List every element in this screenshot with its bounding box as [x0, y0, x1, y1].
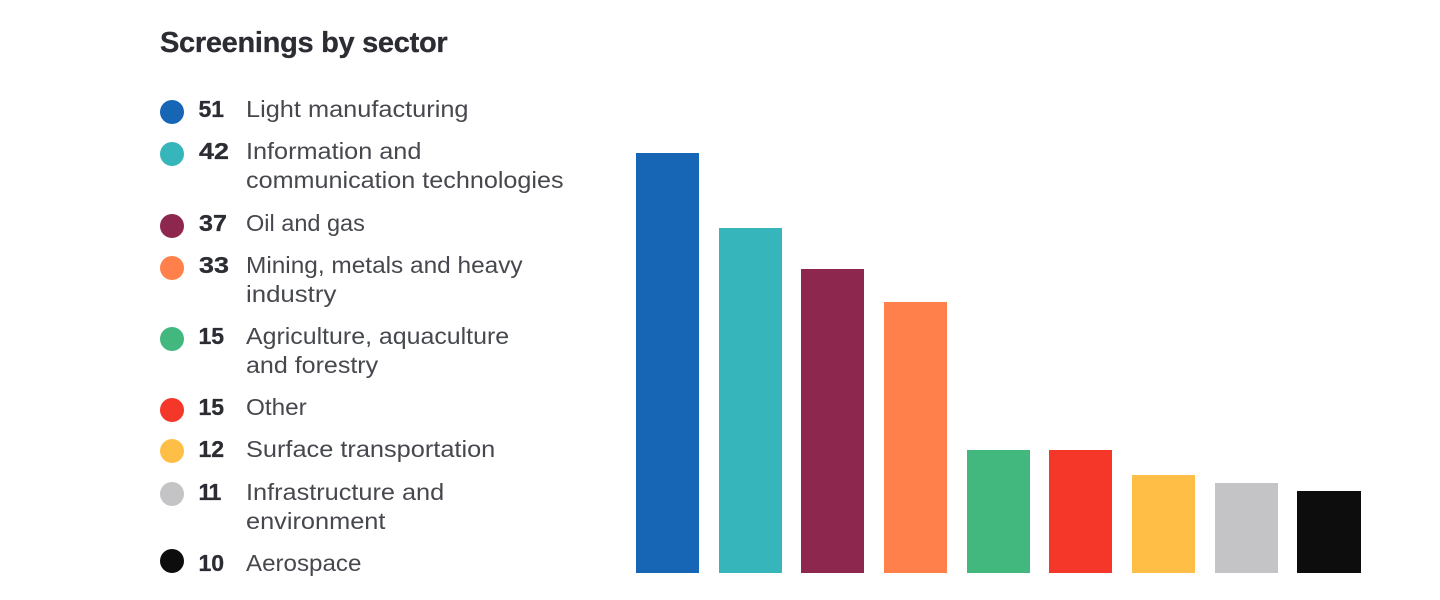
legend item: Mining, metals and heavy industry: 33 — [198, 252, 228, 278]
legend item: Information and communication technologies: communication technologies — [246, 167, 564, 193]
legend item: Light manufacturing: Light manufacturing — [246, 96, 469, 122]
legend item: Infrastructure and environment: environment — [246, 508, 385, 534]
legend item: Aerospace — [160, 549, 361, 576]
legend item: Mining, metals and heavy industry: Mining, metals and heavy — [246, 252, 523, 278]
bar: Other 15 — [1049, 450, 1112, 573]
legend item: Surface transportation: Surface transportation — [246, 436, 495, 462]
bar: Light manufacturing 51 — [636, 153, 699, 573]
title: Screenings by sector — [160, 27, 447, 59]
legend item: Aerospace: Aerospace — [246, 550, 361, 576]
legend item: Other: Other — [246, 394, 307, 420]
legend item: Aerospace: 10 — [198, 550, 224, 576]
bar: Oil and gas 37 — [801, 268, 864, 573]
legend item: Agriculture, aquaculture and forestry — [160, 323, 509, 378]
legend item: Other — [160, 394, 307, 422]
legend — [160, 96, 564, 576]
legend item: Other: 15 — [198, 394, 224, 420]
legend item: Surface transportation: 12 — [198, 436, 224, 462]
legend item: Light manufacturing — [160, 96, 469, 124]
legend item: Information and communication technologies: Information and — [246, 138, 421, 164]
legend item: Mining, metals and heavy industry: industry — [246, 281, 336, 307]
bar: Mining, metals and heavy industry 33 — [884, 302, 947, 573]
legend item: Infrastructure and environment: 11 — [198, 479, 220, 505]
bar chart — [636, 153, 1361, 573]
legend item: Agriculture, aquaculture and forestry: 15 — [198, 323, 224, 349]
legend item: Information and communication technologies: 42 — [198, 138, 228, 164]
bar: Agriculture, aquaculture and forestry 15 — [967, 450, 1030, 573]
bar: Surface transportation 12 — [1132, 474, 1195, 573]
bar: Aerospace 10 — [1297, 491, 1361, 573]
legend item: Oil and gas — [160, 210, 365, 238]
legend item: Agriculture, aquaculture and forestry: Agriculture, aquaculture — [246, 323, 509, 349]
legend item: Oil and gas: 37 — [198, 210, 226, 236]
legend item: Infrastructure and environment — [160, 479, 444, 534]
legend item: Information and communication technologies — [160, 138, 564, 193]
legend item: Infrastructure and environment: Infrastructure and — [246, 479, 444, 505]
legend item: Light manufacturing: 51 — [198, 96, 224, 122]
bar: Information and communication technologies 42 — [719, 228, 782, 573]
bar: Infrastructure and environment 11 — [1215, 483, 1278, 573]
legend item: Mining, metals and heavy industry — [160, 252, 523, 307]
legend item: Agriculture, aquaculture and forestry: and forestry — [246, 352, 378, 378]
legend item: Oil and gas: Oil and gas — [246, 210, 365, 236]
